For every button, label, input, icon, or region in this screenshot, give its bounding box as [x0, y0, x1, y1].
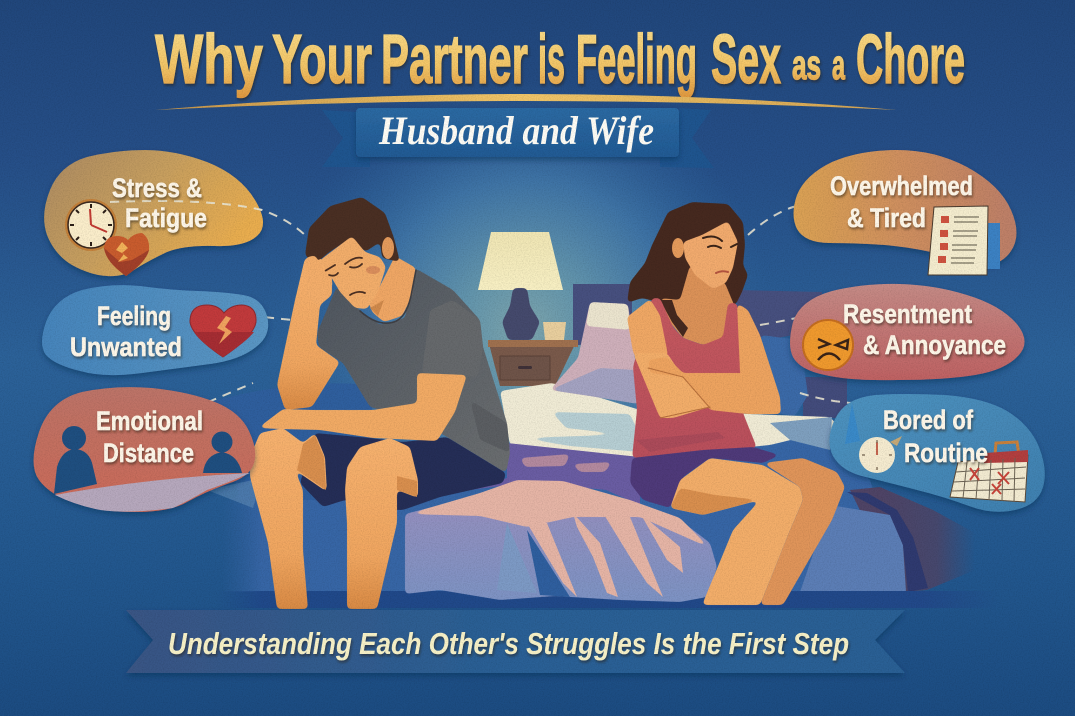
title: as [792, 41, 821, 88]
hair back [627, 202, 748, 335]
forearm one [633, 353, 757, 418]
emotional distance wedge bed reflection [207, 478, 262, 508]
strand over shoulder [660, 300, 688, 337]
label: bored of routine: Bored of [883, 405, 974, 435]
icon: bookmark tab [845, 403, 860, 444]
bubble: bored of routine [829, 394, 1045, 512]
neck [368, 256, 416, 322]
label: overwhelmed & tired: & Tired [847, 203, 926, 233]
banner text: Understanding Each Other's Struggles Is the First Step [168, 626, 849, 661]
label: emotional distance [96, 406, 203, 468]
icon: calendar [950, 442, 1028, 502]
bruise cheek shade [366, 266, 380, 274]
forearm two with hand [648, 357, 781, 414]
title underline [155, 94, 897, 110]
purple bedding [470, 443, 640, 505]
right blue pillow [760, 335, 808, 416]
icon: checklist and folder [928, 206, 1000, 275]
shorts [630, 447, 780, 508]
collar line [360, 270, 416, 323]
dashed connector lines [110, 201, 852, 406]
right arm on knee [258, 373, 467, 441]
title: is [538, 20, 565, 98]
bed right end [800, 487, 975, 592]
label: emotional distance: Emotional [96, 406, 203, 436]
label: resentment & annoyance: & Annoyance [863, 330, 1006, 360]
left leg [250, 428, 327, 609]
ear [672, 238, 684, 258]
left arm propping head [277, 257, 340, 410]
nightstand [488, 322, 578, 386]
title: Sex [711, 20, 781, 98]
arm fold line [648, 368, 710, 418]
right leg [345, 438, 418, 609]
hand on head [305, 255, 333, 306]
eyes, brows and mouth [325, 258, 365, 295]
label: stress & fatigue [112, 173, 207, 233]
eye, brow and lips [703, 237, 737, 273]
label: bored of routine [883, 405, 988, 468]
front leg [670, 458, 803, 605]
label: feeling unwanted: Feeling [97, 301, 171, 331]
figure: husband [250, 197, 510, 609]
far upper arm [737, 303, 781, 414]
blanket pink top and folds [408, 480, 710, 597]
subtitle ribbon [322, 108, 714, 168]
neck and chest [660, 265, 745, 345]
bubble: overwhelmed and tired [794, 150, 1016, 275]
figure: wife [627, 202, 845, 605]
bed left bolster [213, 383, 372, 500]
label: emotional distance: Distance [103, 438, 194, 468]
title: Feeling [576, 20, 697, 98]
label: resentment & annoyance [843, 299, 1006, 360]
label: overwhelmed & tired: Overwhelmed [830, 171, 973, 201]
foot of bed strip [215, 591, 1000, 608]
bubble: emotional distance [34, 387, 255, 512]
icon: broken heart [190, 305, 256, 357]
bed sheet [500, 383, 840, 458]
icon: clock [65, 199, 117, 251]
pillow [550, 302, 640, 404]
bubble: feeling unwanted [42, 285, 268, 375]
label: resentment & annoyance: Resentment [843, 299, 972, 329]
icon: small broken heart [104, 233, 149, 276]
icon: two distant figures [54, 426, 242, 494]
blanket [405, 480, 717, 602]
shirt [317, 268, 510, 473]
title: a [832, 41, 845, 88]
headboard [573, 284, 847, 418]
bottom banner [126, 610, 905, 673]
shorts [300, 433, 506, 510]
icon: angry face [803, 320, 853, 370]
title: Chore [856, 20, 965, 98]
bedroom scene [213, 232, 1000, 608]
title: Partner [381, 20, 528, 98]
label: overwhelmed & tired [830, 171, 973, 233]
bed body [222, 420, 905, 592]
title: Why [155, 20, 263, 98]
bubble: resentment and annoyance [790, 284, 1025, 380]
face [319, 236, 386, 309]
face [683, 221, 738, 289]
subtitle text: Husband and Wife [378, 108, 654, 153]
label: feeling unwanted: Unwanted [70, 332, 182, 362]
bubble: stress and fatigue [44, 150, 263, 276]
ear [382, 237, 394, 259]
neck shadow [370, 300, 384, 316]
label: bored of routine: Routine [904, 438, 988, 468]
title: Your [272, 20, 372, 98]
bedside lamp [478, 232, 563, 340]
near upper arm [627, 299, 668, 365]
tank top [632, 298, 757, 458]
label: stress & fatigue: Fatigue [125, 203, 207, 233]
hair [305, 197, 400, 262]
title [155, 20, 965, 98]
back leg [760, 458, 845, 605]
icon: clock [859, 436, 902, 473]
label: feeling unwanted [70, 301, 182, 362]
label: stress & fatigue: Stress & [112, 173, 202, 203]
